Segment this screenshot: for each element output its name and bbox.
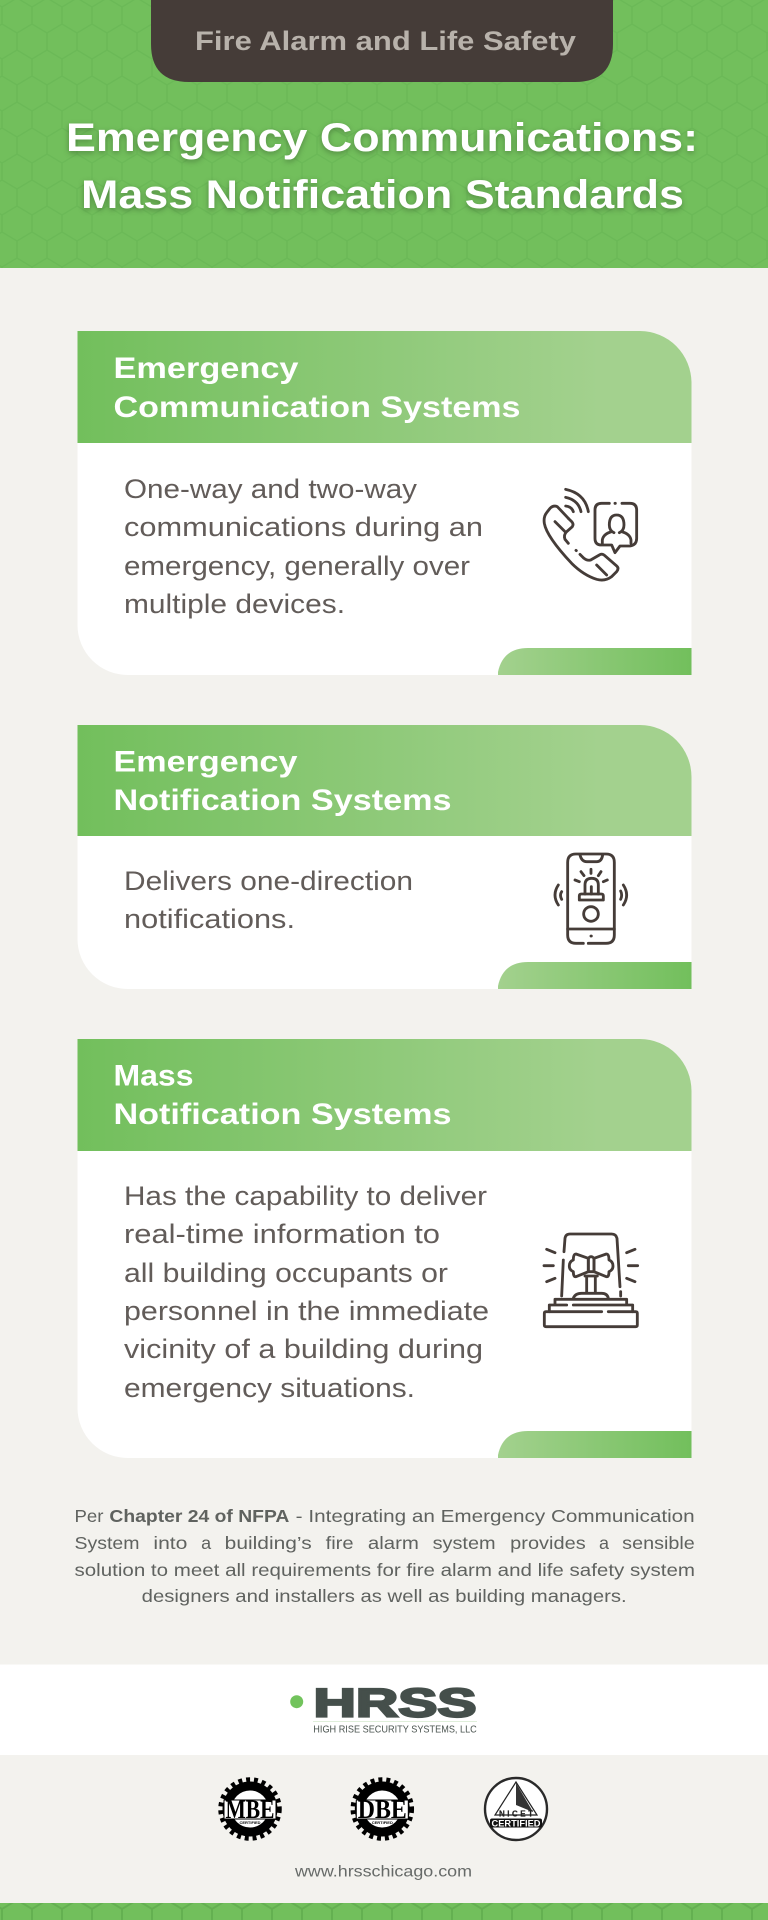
title: [66, 116, 698, 217]
panel: mass notification systems: [78, 1039, 692, 1458]
NFPA paragraph: solution to meet all requirements for fire alarm and life safety system: [74, 1560, 695, 1580]
icon: rotating alarm beacon: [544, 1234, 638, 1327]
NFPA paragraph: building’s: [225, 1533, 312, 1553]
card header: Communication Systems: [114, 391, 520, 424]
icon: phone with contact message: [544, 489, 637, 580]
NFPA paragraph: alarm: [368, 1533, 419, 1553]
card description: [124, 1181, 489, 1403]
NFPA paragraph: System: [74, 1533, 140, 1553]
icon: phone with siren alert: [555, 854, 627, 943]
MBE badge: [221, 1780, 279, 1838]
NFPA paragraph: - Integrating an Emergency Communication: [296, 1506, 695, 1526]
NFPA paragraph: provides: [510, 1533, 586, 1553]
card description: notifications.: [124, 904, 295, 934]
DBE badge: BUSINESS: [373, 1793, 392, 1797]
panel: emergency communication systems: [78, 331, 692, 675]
logo rule: [313, 1721, 477, 1722]
NFPA paragraph: a: [599, 1533, 609, 1553]
card description: real-time information to: [124, 1219, 440, 1249]
card description: Has the capability to deliver: [124, 1181, 487, 1211]
NFPA paragraph: fire: [326, 1533, 354, 1553]
card description: [124, 866, 413, 934]
card header: [78, 1039, 692, 1151]
MBE badge: CERTIFIED: [239, 1820, 261, 1825]
panel: emergency notification systems: [78, 725, 692, 989]
logo tagline: HIGH RISE SECURITY SYSTEMS, LLC: [313, 1724, 477, 1736]
card header: Emergency: [114, 746, 298, 778]
card header: Notification Systems: [114, 784, 452, 817]
NFPA paragraph: a: [201, 1533, 211, 1553]
card header: Notification Systems: [114, 1098, 452, 1131]
bottom accent tab: [498, 1431, 692, 1458]
header band: [0, 0, 768, 268]
NFPA paragraph: system: [433, 1533, 496, 1553]
card header: [78, 725, 692, 836]
category badge: Fire Alarm and Life Safety: [195, 26, 576, 56]
card description: [124, 474, 483, 619]
card header: [78, 331, 692, 443]
card description: One-way and two-way: [124, 474, 418, 504]
MBE badge: MINORITY: [241, 1793, 259, 1797]
card description: all building occupants or: [124, 1258, 448, 1288]
bottom accent tab: [498, 648, 692, 675]
title: Mass Notification Standards: [81, 173, 684, 217]
card description: emergency situations.: [124, 1373, 415, 1403]
logo wordmark: HRSS: [314, 1682, 476, 1726]
card header: Mass: [114, 1060, 194, 1092]
NICET certified badge: NICET: [499, 1810, 533, 1818]
NICET certified badge: CERTIFIED: [492, 1818, 541, 1828]
card description: Delivers one-direction: [124, 866, 413, 896]
NFPA paragraph: Per: [74, 1506, 104, 1526]
card description: emergency, generally over: [124, 551, 470, 581]
card description: vicinity of a building during: [124, 1334, 483, 1364]
NFPA paragraph: sensible: [622, 1533, 695, 1553]
title: Emergency Communications:: [66, 116, 698, 160]
category badge: [151, 0, 613, 82]
MBE badge: MBE: [226, 1795, 274, 1824]
logo band: [0, 1664, 768, 1755]
NFPA paragraph: [74, 1506, 695, 1606]
card header: Emergency: [114, 352, 299, 385]
DBE badge: DBE: [358, 1795, 407, 1824]
NFPA paragraph: Chapter 24 of NFPA: [109, 1506, 290, 1526]
DBE badge: CERTIFIED: [372, 1820, 393, 1825]
NICET certified badge: [485, 1778, 547, 1840]
card description: multiple devices.: [124, 589, 345, 619]
NFPA paragraph: into: [153, 1533, 187, 1553]
footer band: [0, 1903, 768, 1920]
card description: communications during an: [124, 512, 483, 542]
logo dot: [290, 1695, 303, 1708]
card description: personnel in the immediate: [124, 1296, 489, 1326]
website url: www.hrsschicago.com: [294, 1864, 472, 1881]
DBE badge: [353, 1780, 411, 1838]
NFPA paragraph: designers and installers as well as building managers.: [142, 1586, 627, 1606]
bottom accent tab: [498, 962, 692, 989]
